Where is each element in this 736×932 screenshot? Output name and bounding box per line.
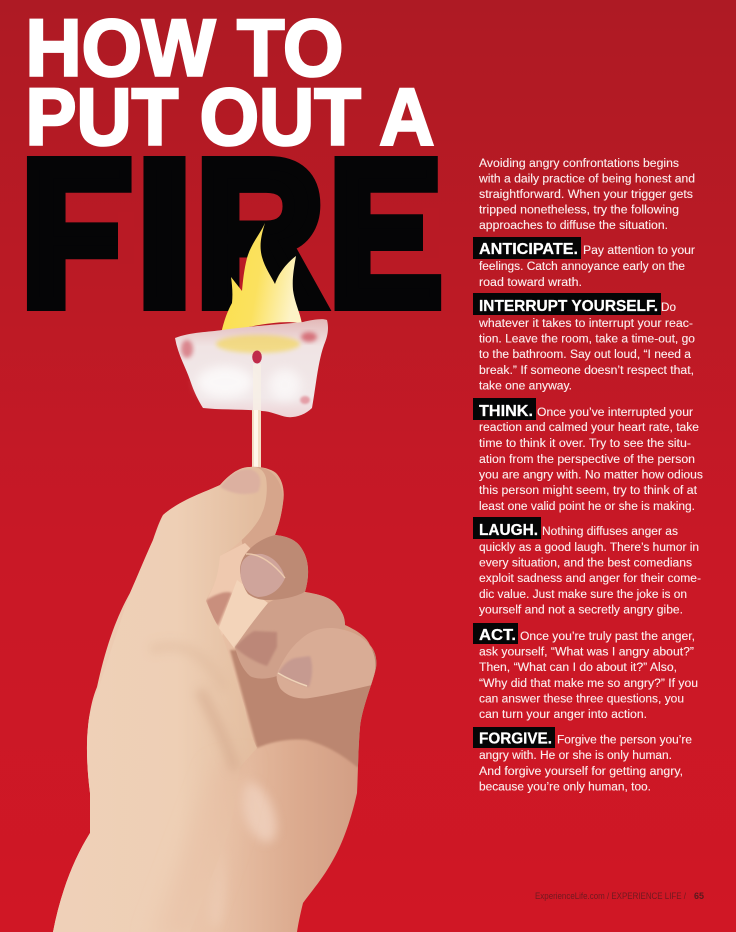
tip: think: this person might seem, try to think of at: [479, 483, 698, 497]
tip: interrupt yourself: take one anyway.: [479, 378, 572, 392]
footer: folio: 65: [694, 891, 705, 902]
intro paragraph: Avoiding angry confrontations begins: [479, 156, 679, 170]
sub: dark palm under fingers: [230, 650, 380, 770]
tip: anticipate: ANTICIPATE.: [479, 241, 578, 258]
sub: ring finger: [235, 593, 345, 679]
sub: palm peach highlights: [241, 782, 280, 844]
tip: forgive: angry with. He or she is only human.: [479, 748, 672, 762]
tip: act: Once you’re truly past the anger,: [520, 629, 695, 643]
tip: anticipate: feelings. Catch annoyance early on the: [479, 259, 685, 273]
title: fire: R: [196, 119, 324, 348]
tip: interrupt yourself: to the bathroom. Say out loud, “I need a: [479, 347, 691, 361]
tip: forgive: And forgive yourself for getting angry,: [479, 764, 683, 778]
tip: laugh: exploit sadness and anger for their come-: [479, 571, 701, 585]
title: how to put out a: [26, 4, 434, 162]
tip: laugh: quickly as a good laugh. There’s humor in: [479, 540, 699, 554]
intro paragraph: [478, 156, 695, 232]
tip: think: ation from the perspective of the person: [479, 452, 695, 466]
tip: laugh: dic value. Just make sure the joke is on: [479, 587, 687, 601]
tip: act: can answer these three questions, you: [479, 692, 684, 706]
sub: little finger: [277, 628, 375, 698]
tip: laugh: [473, 517, 701, 616]
footer: folio: ExperienceLife.com / EXPERIENCE LIFE /: [535, 891, 686, 901]
tip: anticipate: Pay attention to your: [583, 243, 695, 257]
hand holding match: [40, 467, 380, 932]
intro paragraph: straightforward. When your trigger gets: [479, 187, 693, 201]
tip: forgive: [473, 727, 692, 794]
title: fire: [21, 119, 442, 348]
tip: act: ACT.: [479, 627, 516, 644]
title: fire: E: [329, 119, 442, 348]
tip: interrupt yourself: whatever it takes to interrupt your reac-: [478, 316, 693, 330]
tip: think: Once you’ve interrupted your: [537, 405, 693, 419]
tip: forgive: FORGIVE.: [479, 730, 552, 748]
tip: think: time to think it over. Try to see the situ-: [479, 436, 691, 450]
tip: interrupt yourself: Do: [661, 300, 676, 314]
tip: think: least one valid point he or she is making.: [479, 499, 695, 513]
intro paragraph: tripped nonetheless, try the following: [479, 202, 679, 216]
intro paragraph: with a daily practice of being honest and: [478, 172, 695, 186]
tip: forgive: Forgive the person you’re: [557, 732, 692, 746]
tip: act: can turn your anger into action.: [479, 707, 647, 721]
tip: act: ask yourself, “What was I angry about?”: [479, 644, 694, 658]
tip: act: [473, 623, 698, 721]
tip: interrupt yourself: break.” If someone doesn’t respect that,: [479, 363, 694, 377]
tip: anticipate: [473, 237, 695, 289]
title: how to put out a: HOW TO: [26, 4, 344, 94]
icon: matchstick: [252, 350, 262, 470]
title: fire: I: [137, 119, 192, 348]
icon: ice cube: [175, 319, 328, 417]
sub: pale finger base: [218, 543, 250, 635]
tip: forgive: because you’re only human, too.: [479, 780, 651, 794]
title: fire: F: [21, 119, 132, 348]
tip: think: THINK.: [479, 403, 533, 420]
tip: interrupt yourself: tion. Leave the room, take a time-out, go: [479, 332, 695, 346]
tip: anticipate: road toward wrath.: [479, 275, 582, 289]
tip: think: you are angry with. No matter how odious: [479, 468, 703, 482]
tip: laugh: Nothing diffuses anger as: [542, 524, 678, 538]
tip: interrupt yourself: INTERRUPT YOURSELF.: [479, 298, 658, 315]
title: how to put out a: PUT OUT A: [26, 72, 434, 162]
sub: index finger behind thumb: [242, 467, 283, 548]
tip: laugh: yourself and not a secretly angry gibe.: [479, 602, 683, 616]
tip: think: reaction and calmed your heart rate, take: [479, 420, 699, 434]
intro paragraph: approaches to diffuse the situation.: [479, 218, 668, 232]
tip: interrupt yourself: [473, 293, 695, 392]
icon: paper flame: [221, 223, 302, 334]
sub: back of hand and thumb: [40, 467, 267, 932]
sub: curled fingertip with nail: [240, 535, 308, 600]
tip: laugh: LAUGH.: [479, 522, 538, 539]
tip: laugh: every situation, and the best comedians: [479, 556, 692, 570]
tip: act: Then, “What can I do about it?” Also,: [479, 660, 677, 674]
tip: think: [473, 398, 703, 513]
tip: act: “Why did that make me so angry?” If you: [479, 676, 698, 690]
